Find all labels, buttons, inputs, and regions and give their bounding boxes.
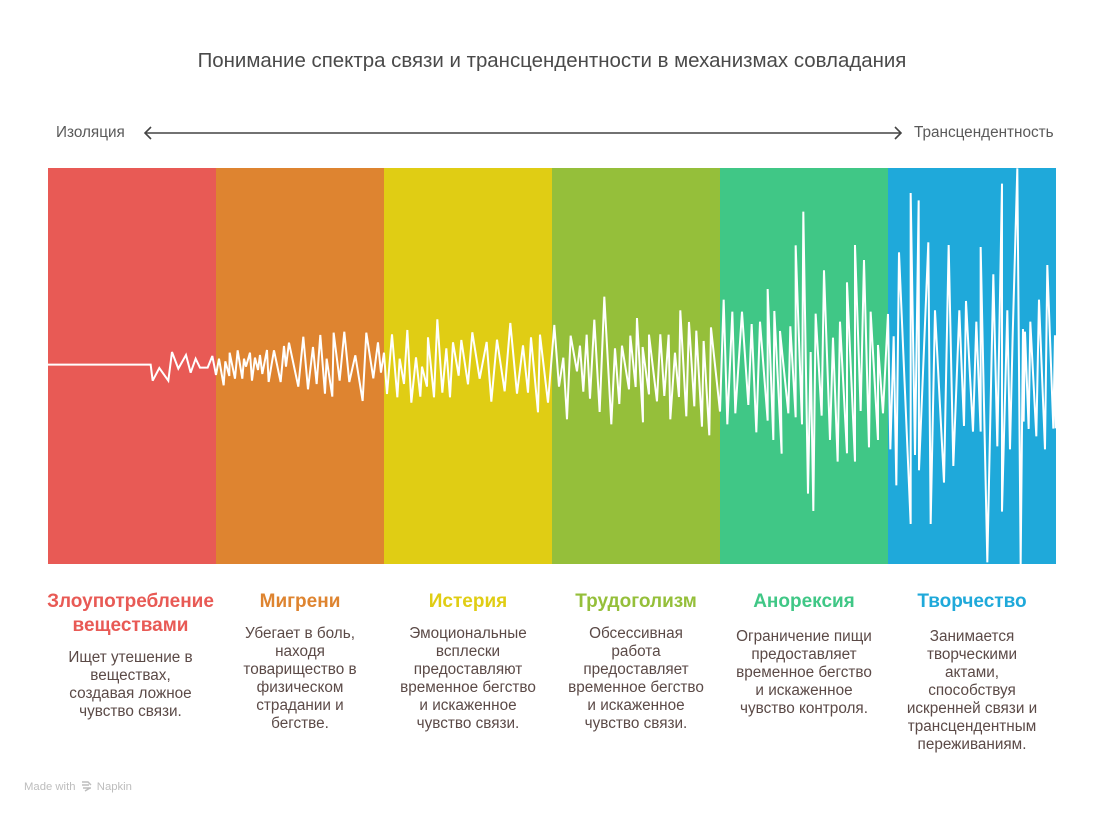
heading: Творчество (917, 591, 1027, 612)
label: isolation: Изоляция (56, 124, 125, 141)
heading: Истерия (429, 591, 507, 612)
description (243, 625, 357, 732)
description: работа (611, 643, 661, 660)
description: предоставляет (751, 646, 857, 663)
description (568, 625, 704, 732)
description: и искаженное (587, 697, 685, 714)
label: transcendence: Трансцендентность (914, 124, 1054, 141)
description (907, 628, 1037, 753)
description: искренней связи и (907, 700, 1037, 717)
description: чувство связи. (585, 715, 687, 732)
description: чувство контроля. (740, 700, 868, 717)
description: страдании и (256, 697, 344, 714)
description: актами, (945, 664, 999, 681)
description: Обсессивная (589, 625, 683, 642)
description: временное бегство (736, 664, 872, 681)
description: товарищество в (243, 661, 357, 678)
heading: Анорексия (753, 591, 855, 612)
column: anorexia (736, 591, 872, 717)
description: Ищет утешение в (68, 649, 193, 666)
description: физическом (257, 679, 343, 696)
description: предоставляют (414, 661, 522, 678)
description: чувство связи. (417, 715, 519, 732)
description: Занимается (930, 628, 1014, 645)
title: Понимание спектра связи и трансцендентности в механизмах совладания (198, 49, 906, 72)
heading: Злоупотребление (47, 591, 214, 612)
heading: веществами (73, 615, 188, 636)
description: всплески (436, 643, 500, 660)
description: временное бегство (400, 679, 536, 696)
waveform (48, 168, 1056, 564)
column: creativity (907, 591, 1037, 753)
description: Убегает в боль, (245, 625, 355, 642)
column: workaholism (568, 591, 704, 732)
description: и искаженное (419, 697, 517, 714)
description: Ограничение пищи (736, 628, 872, 645)
description: создавая ложное (69, 685, 192, 702)
description: трансцендентным (908, 718, 1036, 735)
heading: Трудоголизм (575, 591, 697, 612)
description: бегстве. (271, 715, 329, 732)
column: migraine (243, 591, 357, 732)
description: предоставляет (583, 661, 689, 678)
description: творческими (927, 646, 1017, 663)
description: Эмоциональные (409, 625, 527, 642)
description (68, 649, 193, 720)
column: substance abuse (47, 591, 214, 720)
description: переживаниям. (918, 736, 1026, 753)
description: способствуя (928, 682, 1016, 699)
spectrum arrow (145, 127, 901, 139)
description: находя (275, 643, 325, 660)
column: hysteria (400, 591, 536, 732)
description: временное бегство (568, 679, 704, 696)
description (736, 628, 872, 717)
color bands (48, 168, 1056, 564)
description: и искаженное (755, 682, 853, 699)
watermark: Made with Napkin (24, 781, 132, 793)
heading: Мигрени (260, 591, 340, 612)
heading (47, 591, 214, 636)
description: чувство связи. (79, 703, 182, 720)
description (400, 625, 536, 732)
description: веществах, (90, 667, 171, 684)
